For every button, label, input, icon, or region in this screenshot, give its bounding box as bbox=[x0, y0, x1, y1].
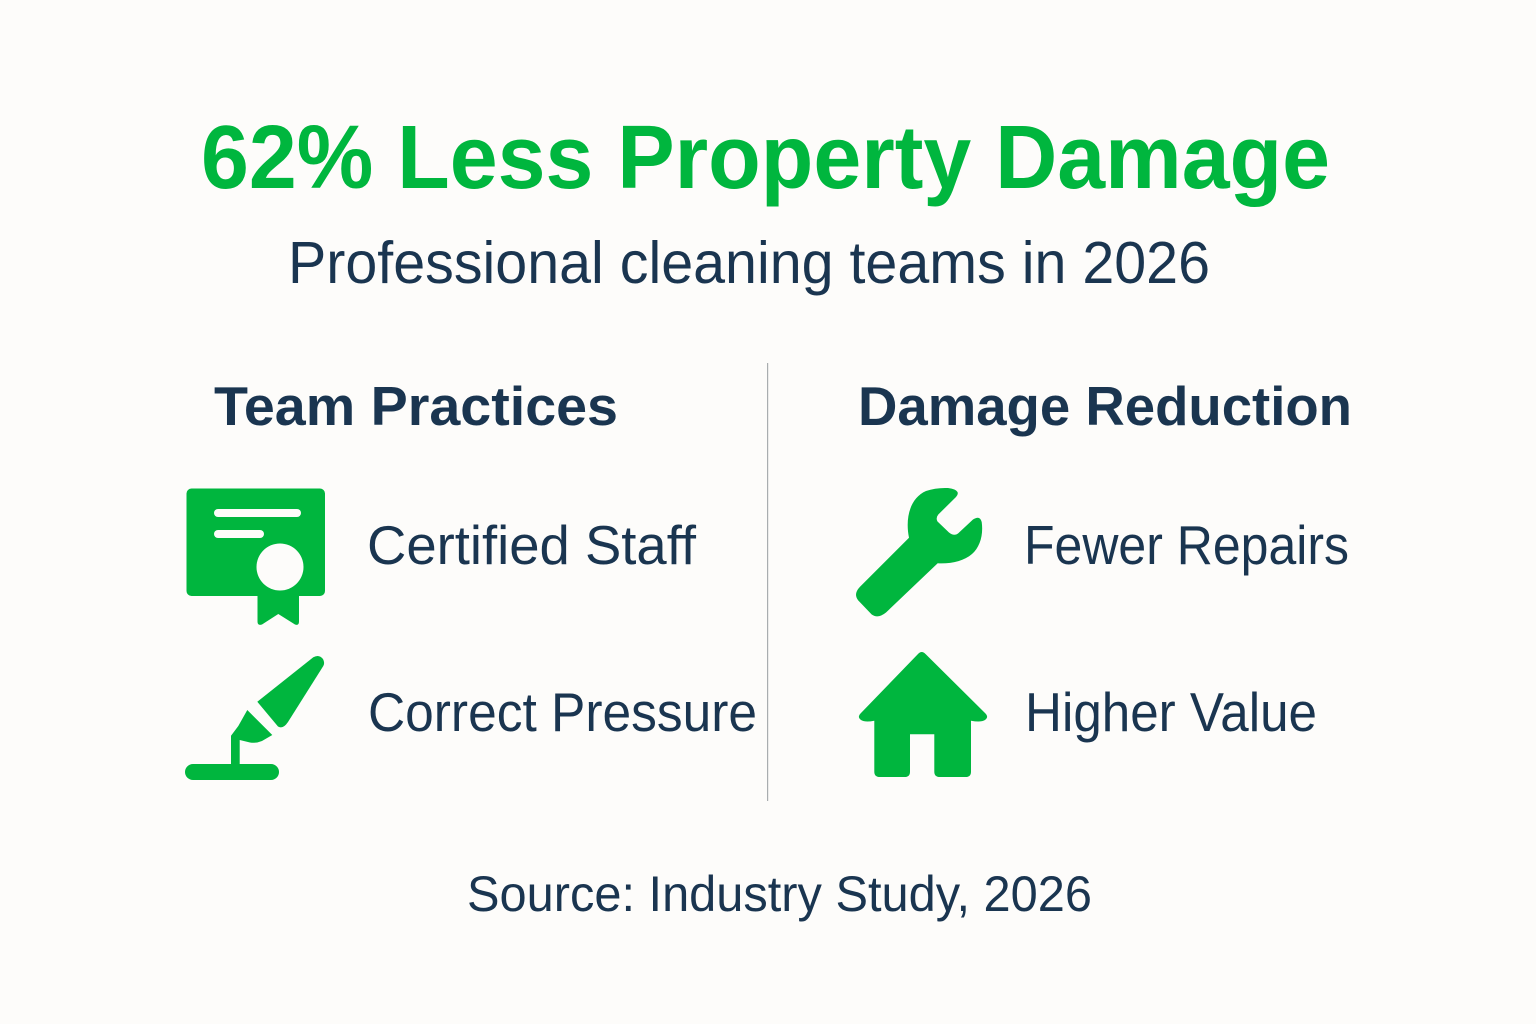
panel: damage reduction bbox=[856, 375, 1352, 777]
panel: team practices bbox=[185, 375, 757, 780]
label: correct pressure: Correct Pressure bbox=[368, 681, 757, 743]
heading: damage reduction: Damage Reduction bbox=[858, 375, 1352, 437]
label: fewer repairs: Fewer Repairs bbox=[1024, 514, 1349, 576]
icon: certificate bbox=[186, 488, 325, 625]
icon: house bbox=[859, 652, 987, 777]
icon: wrench bbox=[856, 488, 982, 616]
label: higher value: Higher Value bbox=[1025, 681, 1317, 743]
heading: team practices: Team Practices bbox=[214, 375, 618, 437]
divider bbox=[767, 363, 768, 801]
icon: brush bbox=[185, 656, 324, 780]
title: 62% Less Property Damage bbox=[201, 108, 1330, 208]
label: certified staff: Certified Staff bbox=[367, 514, 697, 576]
subtitle: Professional cleaning teams in 2026 bbox=[288, 230, 1210, 296]
source note: Source: Industry Study, 2026 bbox=[467, 866, 1092, 922]
